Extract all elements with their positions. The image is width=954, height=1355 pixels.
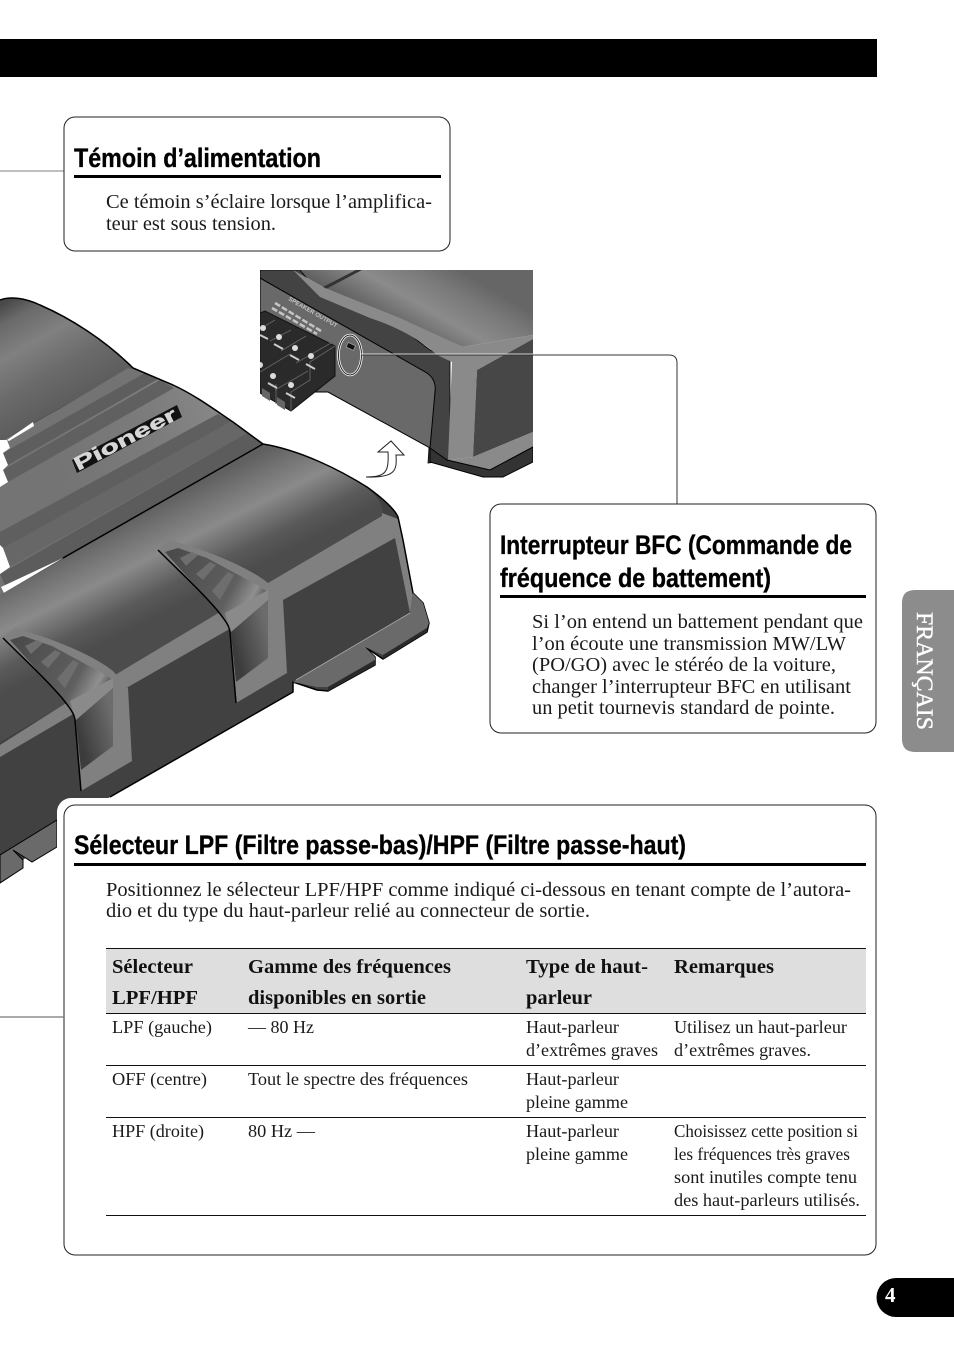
inset right side [473, 339, 533, 457]
row: HPF [112, 1121, 860, 1210]
row: OFF: OFF (centre) [112, 1069, 207, 1089]
vent left [3, 628, 132, 791]
table [106, 948, 866, 1216]
table: Type de haut- [526, 956, 648, 978]
heading: Sélecteur LPF (Filtre passe-bas)/HPF (Filtre passe-haut) [74, 830, 686, 860]
light edge band [0, 513, 413, 757]
row: OFF [112, 1069, 628, 1112]
panel: interrupteur BFC [490, 504, 876, 733]
row: LPF: Haut-parleur [526, 1017, 619, 1037]
inset top surface [293, 270, 533, 347]
top hump [0, 298, 133, 442]
leader line: LPF selector [0, 1016, 64, 1018]
callout ellipse and leader line to BFC box [338, 335, 677, 504]
body text: teur est sous tension. [106, 213, 276, 235]
panel lettering: SPEAKER OUTPUT [287, 297, 338, 330]
panel: sélecteur LPF/HPF [57, 798, 883, 1262]
intro text: Positionnez le sélecteur LPF/HPF comme indiqué ci-dessous en tenant compte de l’autora- [106, 879, 851, 901]
icon: curved arrow [366, 441, 404, 477]
row: HPF: 80 Hz — [248, 1121, 316, 1141]
row: OFF: Tout le spectre des fréquences [248, 1069, 468, 1089]
logo badge: Pioneer [71, 404, 181, 475]
inset light frame [293, 270, 533, 460]
row: HPF: HPF (droite) [112, 1121, 204, 1141]
row: HPF: les fréquences très graves [674, 1144, 850, 1164]
inset panel [260, 278, 435, 448]
table: parleur [526, 987, 592, 1009]
table: Remarques [674, 956, 774, 978]
language tab [902, 590, 954, 752]
amplifier body side [0, 298, 429, 883]
amplifier illustration [0, 298, 429, 883]
row: OFF: pleine gamme [526, 1092, 628, 1112]
heading: fréquence de battement) [500, 563, 771, 593]
body text: (PO/GO) avec le stéréo de la voiture, [532, 654, 836, 676]
heading: Témoin d’alimentation [74, 143, 321, 173]
inset illustration: rear panel with BFC switch [257, 270, 533, 477]
row: OFF: Haut-parleur [526, 1069, 619, 1089]
header bar [0, 39, 877, 77]
base flange [293, 593, 429, 687]
row: LPF: LPF (gauche) [112, 1017, 212, 1037]
table: Sélecteur [112, 956, 193, 978]
top surface front [0, 444, 383, 742]
intro text: dio et du type du haut-parleur relié au connecteur de sortie. [106, 900, 590, 922]
logo badge [71, 404, 182, 475]
heading: Interrupteur BFC (Commande de [500, 530, 852, 560]
table: LPF/HPF [112, 987, 198, 1009]
row: LPF [112, 1017, 847, 1060]
row: LPF: — 80 Hz [247, 1017, 314, 1037]
table: disponibles en sortie [248, 987, 426, 1009]
terminal block [257, 311, 335, 411]
ribbed centre band [0, 368, 263, 595]
row: HPF: pleine gamme [526, 1144, 628, 1164]
body text: changer l’interrupteur BFC en utilisant [532, 676, 851, 698]
row: HPF: Choisissez cette position si [674, 1121, 858, 1141]
page number tab [876, 1278, 954, 1317]
row: HPF: des haut-parleurs utilisés. [674, 1190, 860, 1210]
page number tab: 4 [885, 1283, 896, 1307]
vent right [158, 540, 287, 703]
row: LPF: Utilisez un haut-parleur [674, 1017, 847, 1037]
body text: Si l’on entend un battement pendant que [532, 611, 863, 633]
row: LPF: d’extrêmes graves [526, 1040, 658, 1060]
rib stripes [0, 368, 263, 590]
front left flange [0, 820, 57, 883]
white notches at left of ribs [0, 422, 63, 595]
leader line: power indicator [0, 170, 64, 172]
body text: un petit tournevis standard de pointe. [532, 697, 835, 719]
language tab: FRANÇAIS [912, 612, 937, 730]
row: HPF: Haut-parleur [526, 1121, 619, 1141]
inset foot [448, 432, 533, 470]
table: Gamme des fréquences [248, 956, 451, 978]
body text: Ce témoin s’éclaire lorsque l’amplifica- [106, 191, 432, 213]
inset dark band [260, 270, 450, 463]
BFC switch [346, 342, 355, 350]
row: LPF: d’extrêmes graves. [674, 1040, 811, 1060]
panel: témoin d'alimentation [64, 117, 450, 251]
body text: l’on écoute une transmission MW/LW [532, 633, 846, 655]
row: HPF: sont inutiles compte tenu [674, 1167, 857, 1187]
outline and ridge lines [0, 298, 429, 797]
table header [106, 949, 866, 1013]
